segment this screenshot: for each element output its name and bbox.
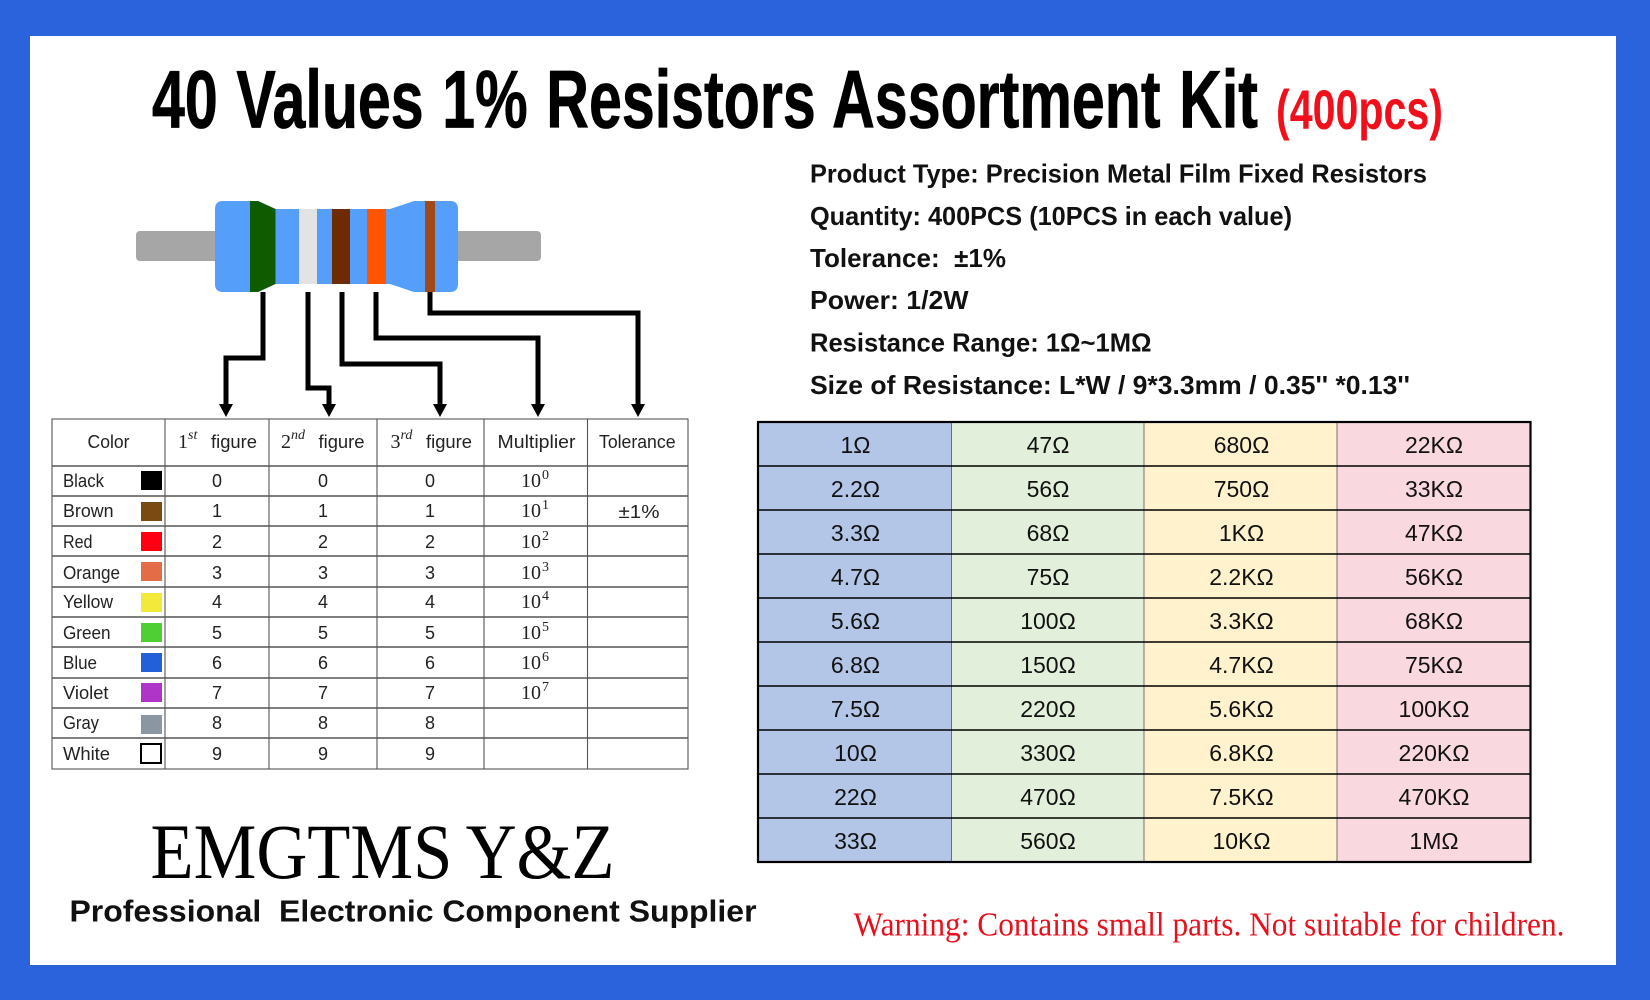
row: gray: 8 — [212, 713, 222, 733]
row: black: 0 — [425, 471, 435, 491]
column 2 values: 75Ω — [1027, 564, 1069, 590]
title quantity note: (400pcs) — [1276, 78, 1443, 141]
row: violet: 10 — [521, 682, 541, 704]
row: violet — [63, 680, 549, 704]
table header: figure — [211, 432, 257, 452]
row: red: 2 — [318, 532, 328, 552]
column 1 values: 22Ω — [834, 784, 877, 810]
table header — [88, 428, 676, 453]
row: blue: 6 — [212, 653, 222, 673]
row: red — [63, 529, 549, 553]
row: brown: 1 — [318, 501, 328, 521]
product specifications: Power: 1/2W — [810, 285, 969, 315]
row: blue: 6 — [425, 653, 435, 673]
row: green: 10 — [521, 622, 541, 644]
row: black: 0 — [212, 471, 222, 491]
column 1 values: 5.6Ω — [831, 608, 880, 634]
warning note: Warning: Contains small parts. Not suitable for children. — [854, 906, 1564, 944]
product specifications — [810, 158, 1427, 400]
column 4 values — [1399, 432, 1469, 854]
table header: 2 — [281, 431, 291, 453]
row: brown: ±1% — [618, 502, 660, 522]
row: orange: 3 — [212, 563, 222, 583]
row: orange: 3 — [425, 563, 435, 583]
product specifications: Tolerance: ±1% — [810, 243, 1006, 273]
row: orange: 10 — [521, 562, 541, 584]
table header: st — [188, 428, 198, 443]
row: black — [63, 468, 549, 492]
column 2 values: 100Ω — [1020, 608, 1076, 634]
colour code table — [52, 419, 688, 769]
column 4 values: 47KΩ — [1405, 520, 1463, 546]
table header: nd — [291, 428, 306, 443]
arrow: third band to third figure — [342, 292, 440, 406]
resistor illustration — [136, 201, 541, 292]
table header: rd — [400, 428, 413, 443]
column 1 values: 2.2Ω — [831, 476, 880, 502]
row: blue: 6 — [542, 650, 549, 665]
row: violet: 7 — [542, 680, 549, 695]
column 2 values — [1020, 432, 1076, 854]
column 1 values: 33Ω — [834, 828, 877, 854]
column 1 values: 6.8Ω — [831, 652, 880, 678]
row: white: 9 — [318, 744, 328, 764]
row: gray: 8 — [425, 713, 435, 733]
row: red: 2 — [425, 532, 435, 552]
product specifications: Quantity: 400PCS (10PCS in each value) — [810, 201, 1292, 231]
product specifications: Product Type: Precision Metal Film Fixed Resistors — [810, 158, 1427, 188]
column 3 values: 6.8KΩ — [1209, 740, 1274, 766]
row: yellow: 4 — [425, 592, 435, 612]
column 2 values: 330Ω — [1020, 740, 1076, 766]
row: violet: 7 — [425, 683, 435, 703]
row: blue — [63, 650, 549, 674]
column 1 values: 4.7Ω — [831, 564, 880, 590]
row: green: 5 — [542, 620, 549, 635]
row: orange — [63, 560, 549, 584]
row: blue: 10 — [521, 652, 541, 674]
brand name: EMGTMS Y&Z — [150, 808, 614, 895]
row: yellow: 10 — [521, 591, 541, 613]
row: brown: 1 — [542, 498, 549, 513]
row: white: 9 — [212, 744, 222, 764]
column 3 values: 2.2KΩ — [1209, 564, 1274, 590]
table header: Color — [88, 432, 130, 452]
column 4 values: 22KΩ — [1405, 432, 1463, 458]
row: violet: 7 — [318, 683, 328, 703]
row: green: 5 — [212, 623, 222, 643]
column 4 values: 100KΩ — [1399, 696, 1469, 722]
table header: figure — [318, 432, 364, 452]
column 2 values: 220Ω — [1020, 696, 1076, 722]
row: gray: Gray — [63, 713, 99, 733]
row: green: Green — [63, 623, 110, 643]
row: yellow: 4 — [318, 592, 328, 612]
column 4 values: 1MΩ — [1409, 828, 1459, 854]
table header: Tolerance — [599, 432, 676, 452]
product specifications: Resistance Range: 1Ω~1MΩ — [810, 328, 1152, 358]
column 3 values: 4.7KΩ — [1209, 652, 1274, 678]
column 1 values: 1Ω — [840, 432, 870, 458]
column 2 values: 470Ω — [1020, 784, 1076, 810]
column 1 values: 7.5Ω — [831, 696, 880, 722]
arrow: second band to second figure — [308, 292, 329, 406]
table header: 1 — [178, 431, 188, 453]
row: white — [63, 744, 435, 764]
row: gray — [63, 713, 435, 734]
arrow: fourth band to multiplier — [376, 292, 538, 406]
row: yellow: 4 — [542, 589, 549, 604]
brand tagline: Professional Electronic Component Supplier — [70, 894, 756, 928]
column 3 values: 1KΩ — [1219, 520, 1264, 546]
row: brown — [63, 498, 660, 522]
row: orange: Orange — [63, 563, 120, 583]
column 4 values: 75KΩ — [1405, 652, 1463, 678]
row: gray: 8 — [318, 713, 328, 733]
row: orange: 3 — [318, 563, 328, 583]
title: 40 Values 1% Resistors Assortment Kit — [152, 54, 1258, 146]
column 3 values: 750Ω — [1214, 476, 1269, 502]
column 4 values: 470KΩ — [1399, 784, 1469, 810]
table header: figure — [426, 432, 472, 452]
column 1 values: 10Ω — [834, 740, 877, 766]
column 1 values: 3.3Ω — [831, 520, 880, 546]
row: brown: 1 — [425, 501, 435, 521]
row: black: 0 — [318, 471, 328, 491]
row: orange: 3 — [542, 560, 549, 575]
table header: 3 — [390, 431, 400, 453]
column 2 values: 560Ω — [1020, 828, 1076, 854]
column 3 values: 680Ω — [1214, 432, 1269, 458]
column 4 values: 33KΩ — [1405, 476, 1463, 502]
row: red: 10 — [521, 531, 541, 553]
column 2 values: 68Ω — [1027, 520, 1069, 546]
row: green: 5 — [425, 623, 435, 643]
column 3 values: 5.6KΩ — [1209, 696, 1274, 722]
row: red: 2 — [542, 529, 549, 544]
column 3 values — [1209, 432, 1274, 854]
row: white: White — [63, 744, 110, 764]
row: white: 9 — [425, 744, 435, 764]
row: violet: 7 — [212, 683, 222, 703]
column 2 values: 150Ω — [1020, 652, 1076, 678]
row: green — [63, 620, 549, 644]
arrow: first band to first figure — [226, 292, 263, 406]
row: blue: Blue — [63, 653, 97, 673]
row: brown: 10 — [521, 500, 541, 522]
column 1 values — [831, 432, 880, 854]
row: blue: 6 — [318, 653, 328, 673]
column 4 values: 220KΩ — [1399, 740, 1469, 766]
product specifications: Size of Resistance: L*W / 9*3.3mm / 0.35'' *0.13'' — [810, 370, 1410, 400]
arrows from colour bands to table columns — [219, 292, 645, 417]
row: black: Black — [63, 471, 105, 491]
table header: Multiplier — [498, 432, 576, 452]
row: brown: 1 — [212, 501, 222, 521]
resistor values table — [758, 422, 1530, 862]
row: brown: Brown — [63, 501, 114, 521]
row: yellow: 4 — [212, 592, 222, 612]
row: black: 10 — [521, 470, 541, 492]
row: yellow — [63, 589, 549, 613]
column 2 values: 56Ω — [1027, 476, 1069, 502]
row: yellow: Yellow — [63, 592, 114, 612]
column 3 values: 7.5KΩ — [1209, 784, 1274, 810]
column 4 values: 68KΩ — [1405, 608, 1463, 634]
row: black: 0 — [542, 468, 549, 483]
arrow: tolerance band to tolerance column — [430, 292, 638, 406]
column 3 values: 10KΩ — [1212, 828, 1271, 854]
row: red: Red — [63, 532, 92, 552]
column 3 values: 3.3KΩ — [1209, 608, 1274, 634]
column 4 values: 56KΩ — [1405, 564, 1463, 590]
row: violet: Violet — [63, 683, 108, 703]
row: red: 2 — [212, 532, 222, 552]
column 2 values: 47Ω — [1027, 432, 1069, 458]
row: green: 5 — [318, 623, 328, 643]
